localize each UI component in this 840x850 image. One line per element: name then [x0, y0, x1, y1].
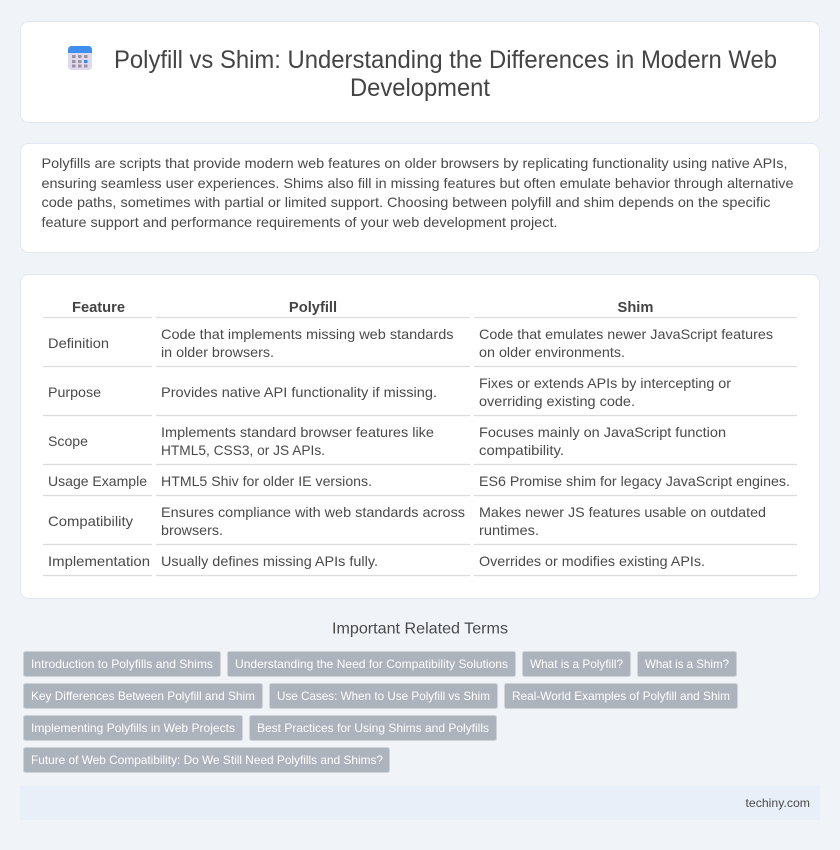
row: scope: Focuses mainly on JavaScript function: [479, 424, 726, 440]
related term tags: What is a Polyfill?: [530, 657, 623, 671]
table header: Polyfill: [289, 300, 337, 316]
row: purpose: Provides native API functionality if missing.: [161, 384, 437, 400]
intro paragraph: code paths, sometimes with partial or limited support. Choosing between polyfill and shim depends on the specific: [42, 194, 770, 210]
row: compatibility: browsers.: [161, 522, 223, 538]
row: scope: Implements standard browser features like: [161, 424, 434, 440]
title text: [114, 46, 777, 102]
row: compatibility: Makes newer JS features usable on outdated: [479, 504, 766, 520]
row: definition: in older browsers.: [161, 344, 274, 360]
table rules: [43, 318, 797, 576]
intro paragraph: [42, 155, 794, 230]
row: definition: [48, 326, 773, 360]
table header: Shim: [618, 300, 653, 316]
related term tags: Best Practices for Using Shims and Polyfills: [257, 721, 489, 735]
row: implementation: Implementation: [48, 553, 150, 569]
related term tags: Real-World Examples of Polyfill and Shim: [512, 689, 730, 703]
row: usage example: Usage Example: [48, 473, 147, 489]
row: purpose: Purpose: [48, 384, 101, 400]
row: compatibility: [48, 504, 766, 538]
row: usage example: [48, 473, 790, 489]
title text: Development: [350, 74, 490, 102]
table header: Feature: [72, 300, 125, 316]
row: scope: [48, 424, 726, 458]
related term tags: Use Cases: When to Use Polyfill vs Shim: [277, 689, 490, 703]
row: definition: Definition: [48, 335, 109, 351]
row: usage example: HTML5 Shiv for older IE versions.: [161, 473, 372, 489]
row: compatibility: Ensures compliance with web standards across: [161, 504, 465, 520]
row: implementation: Overrides or modifies existing APIs.: [479, 553, 705, 569]
row: implementation: [48, 553, 705, 569]
footer: techiny.com: [746, 796, 810, 810]
row: definition: Code that implements missing web standards: [161, 326, 454, 342]
heading: important related terms: Important Related Terms: [332, 620, 508, 638]
row: scope: compatibility.: [479, 442, 564, 458]
panel: introduction: [20, 144, 820, 252]
intro paragraph: feature support and performance requirements of your web development project.: [42, 214, 558, 230]
intro paragraph: Polyfills are scripts that provide modern web features on older browsers by replicating functionality using native APIs,: [42, 155, 788, 171]
panel: title: [20, 22, 820, 122]
row: purpose: Fixes or extends APIs by intercepting or: [479, 375, 731, 391]
related term tags: Understanding the Need for Compatibility Solutions: [235, 657, 508, 671]
footer: [20, 786, 820, 820]
title text: Polyfill vs Shim: Understanding the Differences in Modern Web: [114, 46, 777, 74]
row: scope: Scope: [48, 433, 88, 449]
row: compatibility: runtimes.: [479, 522, 539, 538]
related term tags: What is a Shim?: [645, 657, 729, 671]
row: usage example: ES6 Promise shim for legacy JavaScript engines.: [479, 473, 790, 489]
icon: calendar grid: [68, 46, 92, 70]
intro paragraph: ensuring seamless user experiences. Shims also fill in missing features but often emulate behavior through alternative: [42, 175, 794, 191]
table header: [72, 300, 653, 316]
row: definition: Code that emulates newer JavaScript features: [479, 326, 773, 342]
related term tags: Future of Web Compatibility: Do We Still Need Polyfills and Shims?: [31, 753, 383, 767]
row: compatibility: Compatibility: [48, 513, 133, 529]
row: definition: on older environments.: [479, 344, 625, 360]
row: purpose: [48, 375, 731, 409]
panel: comparison table: [20, 274, 820, 598]
row: implementation: Usually defines missing APIs fully.: [161, 553, 378, 569]
row: purpose: overriding existing code.: [479, 393, 635, 409]
related term tags: Introduction to Polyfills and Shims: [31, 657, 213, 671]
related term tags: Implementing Polyfills in Web Projects: [31, 721, 235, 735]
related term tags: [24, 652, 738, 772]
row: scope: HTML5, CSS3, or JS APIs.: [161, 442, 325, 458]
related term tags: Key Differences Between Polyfill and Shim: [31, 689, 255, 703]
